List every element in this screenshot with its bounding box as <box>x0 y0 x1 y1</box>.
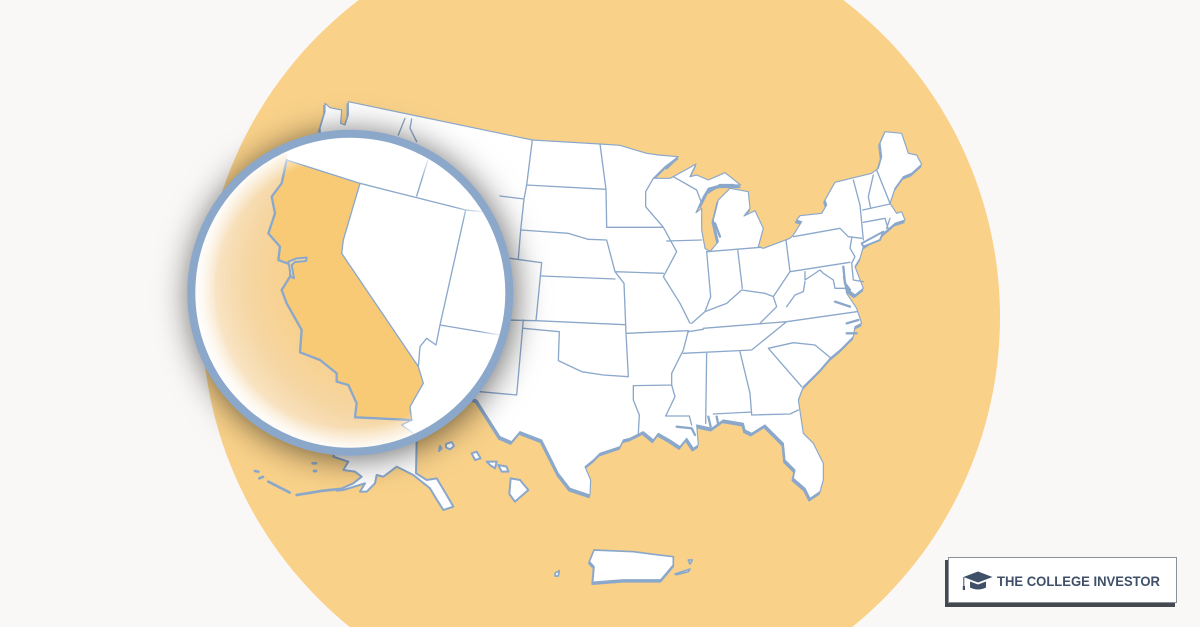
white neighbouring states <box>286 138 506 434</box>
logo panel <box>948 558 1176 602</box>
map: Alaska, Hawaii and Puerto Rico <box>255 440 692 584</box>
California <box>268 160 423 420</box>
Aleutian Islands <box>255 463 340 495</box>
lens shadow <box>188 131 512 455</box>
lens background <box>194 137 506 449</box>
logo shadow <box>945 560 1175 607</box>
land <box>320 102 922 498</box>
orange background circle <box>202 0 1000 627</box>
state borders <box>398 118 890 433</box>
lens edge fade <box>194 137 506 449</box>
map: contiguous United States <box>319 102 922 501</box>
state borders in lens <box>287 158 500 433</box>
magnifier lens <box>188 123 547 457</box>
coast shadow <box>319 104 921 501</box>
inland bays and Long Island <box>862 232 883 247</box>
Puerto Rico land <box>555 550 692 582</box>
lens ring <box>191 134 509 452</box>
logo badge <box>945 558 1176 607</box>
logo wordmark: THE COLLEGE INVESTOR <box>997 574 1160 589</box>
Hawaii <box>472 452 528 502</box>
Alaska <box>333 440 453 510</box>
small Pacific islands <box>439 442 454 451</box>
California coast <box>268 160 412 420</box>
San Francisco Bay <box>288 258 307 278</box>
coastal bay details <box>667 158 858 435</box>
icon: graduation cap <box>963 572 992 590</box>
magnified map <box>196 138 506 448</box>
Puerto Rico <box>589 552 673 584</box>
